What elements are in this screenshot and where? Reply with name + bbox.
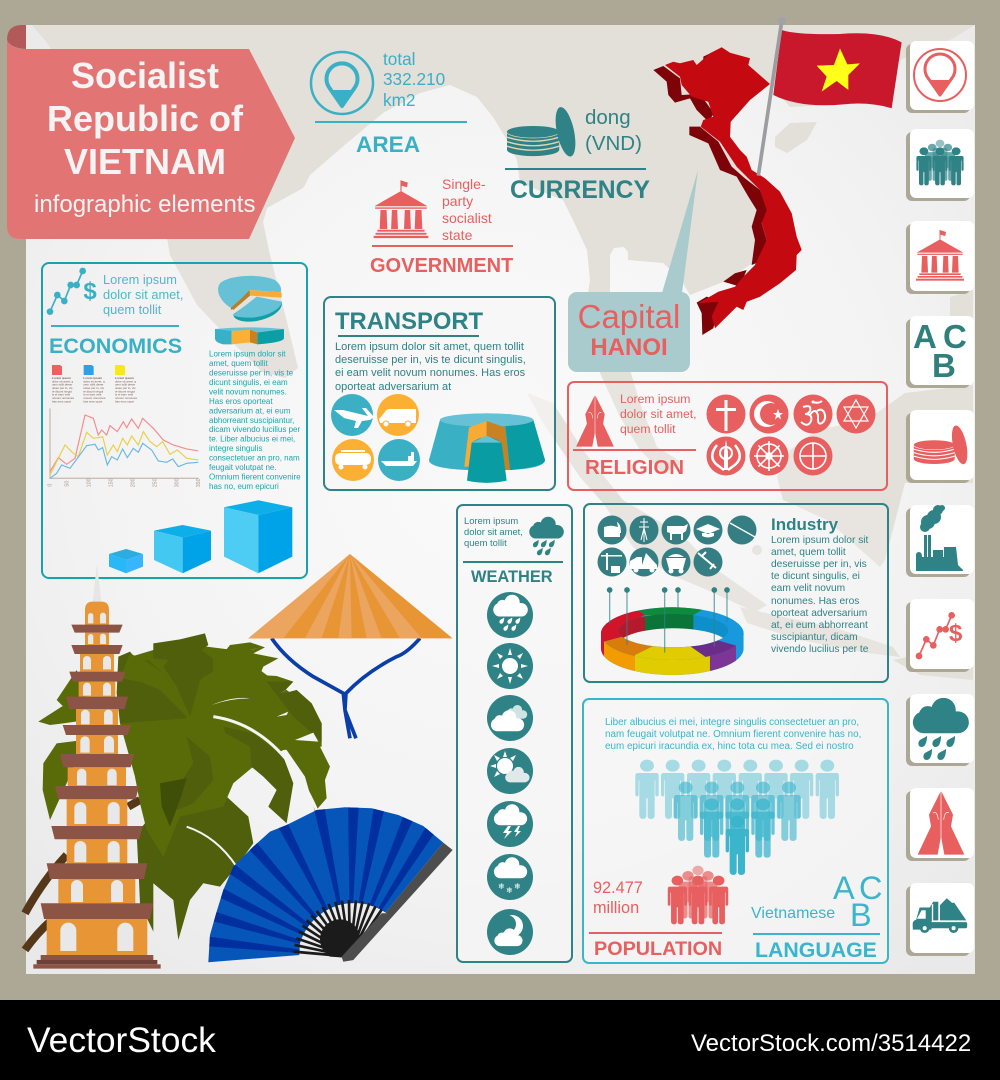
panel: population and language bbox=[583, 699, 888, 963]
icon: alphabet letters: B bbox=[850, 897, 872, 933]
population paragraph: eum epicuri iracundia ex, hinc tota cu mea. Sed ei nostro bbox=[605, 741, 854, 752]
icon: sun and cloud bbox=[487, 748, 533, 794]
ring hole bbox=[618, 614, 728, 648]
panel: industry bbox=[584, 504, 888, 682]
title text: Republic of bbox=[47, 98, 244, 139]
line chart with legend: has eros oport bbox=[52, 399, 71, 403]
line chart with legend: has eros oport bbox=[115, 399, 134, 403]
economics paragraph: consectetuer an pro, nam bbox=[209, 454, 300, 462]
card icon: growth bbox=[916, 612, 963, 659]
weather text bbox=[464, 515, 523, 548]
icon: praying hands bbox=[576, 395, 614, 447]
industry paragraph: suscipiantur, dicam bbox=[771, 632, 858, 643]
icon: rain cloud bbox=[529, 517, 564, 555]
industry paragraph: oporteat adversarium bbox=[771, 608, 867, 619]
economics paragraph: feugait volutpat ne. bbox=[209, 463, 277, 472]
industry paragraph: Lorem ipsum dolor sit bbox=[771, 535, 869, 546]
currency value bbox=[585, 106, 642, 155]
icon: khanda bbox=[706, 436, 746, 476]
pictogram people bbox=[635, 760, 839, 875]
icon: om bbox=[794, 394, 832, 434]
card icon: growth: $ bbox=[949, 620, 963, 647]
population paragraph: Liber albucius ei mei, integre singulis consectetuer an pro, bbox=[605, 717, 859, 728]
religion text: quem tollit bbox=[620, 422, 676, 436]
transport heading: TRANSPORT bbox=[335, 308, 484, 335]
panel: economics bbox=[42, 263, 307, 578]
industry paragraph: at, ei eum abhorreant bbox=[771, 620, 868, 631]
watermark right: VectorStock.com/3514422 bbox=[691, 1030, 971, 1057]
line chart with legend: Lorem ipsum bbox=[83, 376, 102, 380]
religion text: Lorem ipsum bbox=[620, 392, 690, 406]
panel: weather bbox=[457, 505, 572, 962]
religion heading: RELIGION bbox=[585, 456, 684, 479]
line chart with legend: dolor sit amet, q bbox=[115, 379, 137, 383]
trunks bbox=[25, 800, 140, 950]
title ribbon bbox=[7, 25, 295, 239]
cut cylinder chart bbox=[429, 413, 545, 483]
Vietnam map bbox=[653, 47, 802, 335]
line chart with legend: 150 bbox=[108, 478, 114, 487]
conical hat bbox=[248, 554, 453, 738]
icon: alphabet letters: C bbox=[859, 870, 882, 906]
line chart with legend: uem tollit deser bbox=[52, 383, 72, 387]
industry paragraph: nonumes. Has eros bbox=[771, 596, 859, 607]
line chart with legend: te dicunt singul bbox=[115, 389, 135, 393]
economics paragraph: Lorem ipsum dolor sit bbox=[209, 350, 286, 358]
card icon: letters: B bbox=[932, 347, 956, 384]
economics paragraph: dicam vivendo lucilius per bbox=[209, 425, 300, 434]
language name: Vietnamese bbox=[751, 905, 835, 922]
title text bbox=[47, 55, 244, 182]
government text bbox=[442, 176, 492, 243]
religion text: dolor sit amet, bbox=[620, 407, 697, 421]
transport paragraph: oporteat adversarium at bbox=[335, 381, 451, 393]
panel: religion bbox=[568, 382, 887, 490]
economics intro: Lorem ipsum bbox=[103, 272, 177, 287]
card icon: truck bbox=[913, 898, 967, 933]
folding fan bbox=[208, 807, 452, 962]
area value: total bbox=[383, 49, 416, 69]
icon: moon and cloud bbox=[487, 909, 533, 955]
economics paragraph: Omnium fierent convenire bbox=[209, 472, 301, 482]
economics paragraph: Has eros oporteat bbox=[209, 397, 273, 406]
economics paragraph: adversarium at, ei eum bbox=[209, 406, 291, 416]
line chart with legend: is ei eam velit bbox=[52, 393, 70, 397]
economics paragraph: abhorreant suscipiantur, bbox=[209, 416, 294, 425]
transport paragraph bbox=[335, 341, 526, 393]
icon: snow: ❄ bbox=[514, 882, 521, 891]
icon: dharma wheel bbox=[750, 436, 788, 476]
ring chart pins bbox=[607, 587, 730, 653]
line chart with legend: 300 bbox=[174, 478, 180, 487]
government text: socialist bbox=[442, 210, 492, 226]
capital label: Capital bbox=[578, 298, 680, 335]
population value: million bbox=[593, 899, 639, 917]
population paragraph bbox=[605, 717, 861, 752]
government text: Single- bbox=[442, 176, 486, 192]
line chart with legend: is ei eam velit bbox=[115, 393, 133, 397]
line chart with legend: uem tollit deser bbox=[83, 383, 104, 387]
card icon: letters: C bbox=[943, 318, 967, 355]
government text: party bbox=[442, 193, 473, 209]
title text: Socialist bbox=[71, 55, 219, 96]
transport paragraph: Lorem ipsum dolor sit amet, quem tollit bbox=[335, 341, 524, 353]
economics paragraph: amet, quem tollit bbox=[209, 359, 268, 368]
industry paragraph: amet, quem tollit bbox=[771, 547, 846, 558]
icon: snow: ❄ bbox=[498, 882, 505, 891]
industry paragraph: deseruisse per in, vis bbox=[771, 559, 867, 570]
transport paragraph: ei eam velit novum nonumes. Has eros bbox=[335, 367, 526, 379]
icon: cloud bbox=[487, 695, 533, 741]
line chart with legend: novum nonumes bbox=[52, 396, 75, 400]
card icon: hands bbox=[918, 791, 964, 855]
pie chart bbox=[215, 276, 284, 344]
population heading: POPULATION bbox=[594, 938, 722, 960]
industry paragraph: eam velit novum bbox=[771, 583, 845, 594]
icon: growth and dollar bbox=[47, 268, 97, 315]
line chart with legend bbox=[48, 365, 202, 487]
title text: VIETNAM bbox=[64, 141, 226, 182]
line chart with legend: novum nonumes bbox=[115, 396, 138, 400]
industry paragraph: te dicunt singulis, ei bbox=[771, 571, 860, 582]
icon grid bbox=[598, 516, 756, 576]
card icon: letters bbox=[913, 318, 967, 384]
economics paragraph: integre singulis bbox=[209, 444, 262, 453]
weather text: dolor sit amet, bbox=[464, 526, 523, 537]
card icon: factory bbox=[916, 505, 963, 571]
footer bar bbox=[0, 1000, 1000, 1080]
government heading: GOVERNMENT bbox=[370, 255, 513, 277]
icon: snow bbox=[487, 854, 533, 900]
icon: sun bbox=[487, 643, 533, 689]
area heading: AREA bbox=[356, 132, 420, 157]
line chart with legend: uisse per in, vis bbox=[115, 386, 136, 390]
icon: map pin bbox=[311, 52, 373, 114]
icon: temple bbox=[374, 180, 428, 238]
weather text: Lorem ipsum bbox=[464, 515, 518, 526]
world map continents bbox=[32, 25, 975, 680]
currency block bbox=[505, 105, 650, 204]
icon: circled cross bbox=[794, 436, 832, 476]
line chart with legend: 250 bbox=[152, 478, 158, 487]
currency value: (VND) bbox=[585, 132, 642, 155]
economics paragraph: velit novum nonumes. bbox=[209, 388, 287, 396]
watermark left: VectorStock bbox=[27, 1020, 216, 1060]
line chart with legend: 50 bbox=[64, 481, 70, 487]
icon: cross bbox=[706, 394, 746, 434]
economics intro bbox=[103, 272, 183, 317]
economics intro: quem tollit bbox=[103, 302, 162, 317]
card icon: letters: A bbox=[913, 318, 937, 355]
capital callout bbox=[568, 170, 698, 372]
government block bbox=[370, 176, 513, 277]
line chart with legend: te dicunt singul bbox=[52, 389, 72, 393]
economics paragraph: te. Liber albucius ei mei, bbox=[209, 434, 295, 444]
ring chart bbox=[600, 587, 744, 675]
icon: rain bbox=[487, 592, 533, 638]
card icon: pin bbox=[914, 49, 966, 101]
icon: ship bbox=[378, 439, 420, 481]
economics heading: ECONOMICS bbox=[49, 333, 182, 358]
currency value: dong bbox=[585, 106, 631, 129]
line chart with legend: novum nonumes bbox=[83, 396, 106, 400]
area value bbox=[383, 49, 445, 110]
economics paragraph: dicunt singulis, ei eam bbox=[209, 378, 288, 387]
capital name: HANOI bbox=[590, 334, 668, 361]
area value: km2 bbox=[383, 90, 415, 110]
religion text bbox=[620, 392, 697, 436]
industry paragraph: vivendo lucilius per te bbox=[771, 644, 869, 655]
card icon: crowd bbox=[916, 140, 964, 185]
line chart with legend: dolor sit amet, q bbox=[83, 379, 105, 383]
area value: 332.210 bbox=[383, 69, 445, 89]
transport paragraph: deseruisse per in, vis te dicunt singulis, bbox=[335, 354, 526, 366]
economics paragraph: has no, eum epicuri bbox=[209, 482, 279, 491]
icon: growth and dollar: $ bbox=[83, 278, 97, 305]
currency heading: CURRENCY bbox=[510, 177, 650, 204]
line chart with legend: 350 bbox=[196, 478, 202, 487]
icon: star of David bbox=[836, 394, 876, 434]
industry heading: Industry bbox=[771, 515, 839, 534]
industry paragraph bbox=[771, 535, 869, 655]
icon: snow: ❄ bbox=[506, 886, 513, 895]
icon: thunderstorm bbox=[487, 801, 533, 847]
line chart with legend: is ei eam velit bbox=[83, 393, 102, 397]
icon: red crowd bbox=[668, 866, 728, 924]
language heading: LANGUAGE bbox=[755, 938, 877, 962]
subtitle: infographic elements bbox=[34, 191, 255, 218]
weather heading: WEATHER bbox=[471, 568, 553, 586]
card icon: temple bbox=[916, 230, 964, 281]
line chart with legend: Lorem ipsum bbox=[115, 376, 134, 380]
line chart with legend: uisse per in, vis bbox=[52, 386, 73, 390]
icon: crescent and star bbox=[750, 394, 788, 434]
line chart with legend: Lorem ipsum bbox=[52, 376, 71, 380]
population value bbox=[593, 879, 643, 917]
population paragraph: nam feugait volutpat ne. Omnium fierent convenire has no, bbox=[605, 729, 861, 740]
weather text: quem tollit bbox=[464, 537, 507, 548]
panel: transport bbox=[324, 297, 555, 490]
area block bbox=[311, 49, 467, 157]
economics intro: dolor sit amet, bbox=[103, 287, 183, 302]
line chart with legend: 0 bbox=[48, 484, 54, 487]
icon: alphabet letters bbox=[833, 870, 882, 933]
government text: state bbox=[442, 227, 473, 243]
line chart with legend: te dicunt singul bbox=[83, 389, 104, 393]
pagoda bbox=[33, 563, 161, 969]
card icon: rain cloud bbox=[913, 698, 969, 760]
line chart with legend: 100 bbox=[86, 478, 92, 487]
population value: 92.477 bbox=[593, 879, 643, 897]
palm tree bbox=[38, 633, 330, 940]
line chart with legend: dolor sit amet, q bbox=[52, 379, 74, 383]
line chart with legend: uem tollit deser bbox=[115, 383, 135, 387]
icon: coins bbox=[507, 105, 579, 158]
flag of Vietnam bbox=[758, 17, 902, 176]
line chart with legend: has eros oport bbox=[83, 399, 103, 403]
icon: train tanker bbox=[332, 439, 374, 481]
card icon: coins bbox=[914, 424, 970, 466]
icon: alphabet letters: A bbox=[833, 870, 855, 906]
economics paragraph bbox=[209, 350, 301, 491]
line chart with legend: uisse per in, vis bbox=[83, 386, 104, 390]
line chart with legend: 200 bbox=[130, 478, 136, 487]
3D cube bars bbox=[109, 500, 292, 573]
economics paragraph: deseruisse per in, vis te bbox=[209, 368, 294, 378]
icon: plane bbox=[331, 394, 374, 436]
sidebar icon cards bbox=[906, 41, 974, 956]
icon: bus bbox=[377, 394, 419, 436]
